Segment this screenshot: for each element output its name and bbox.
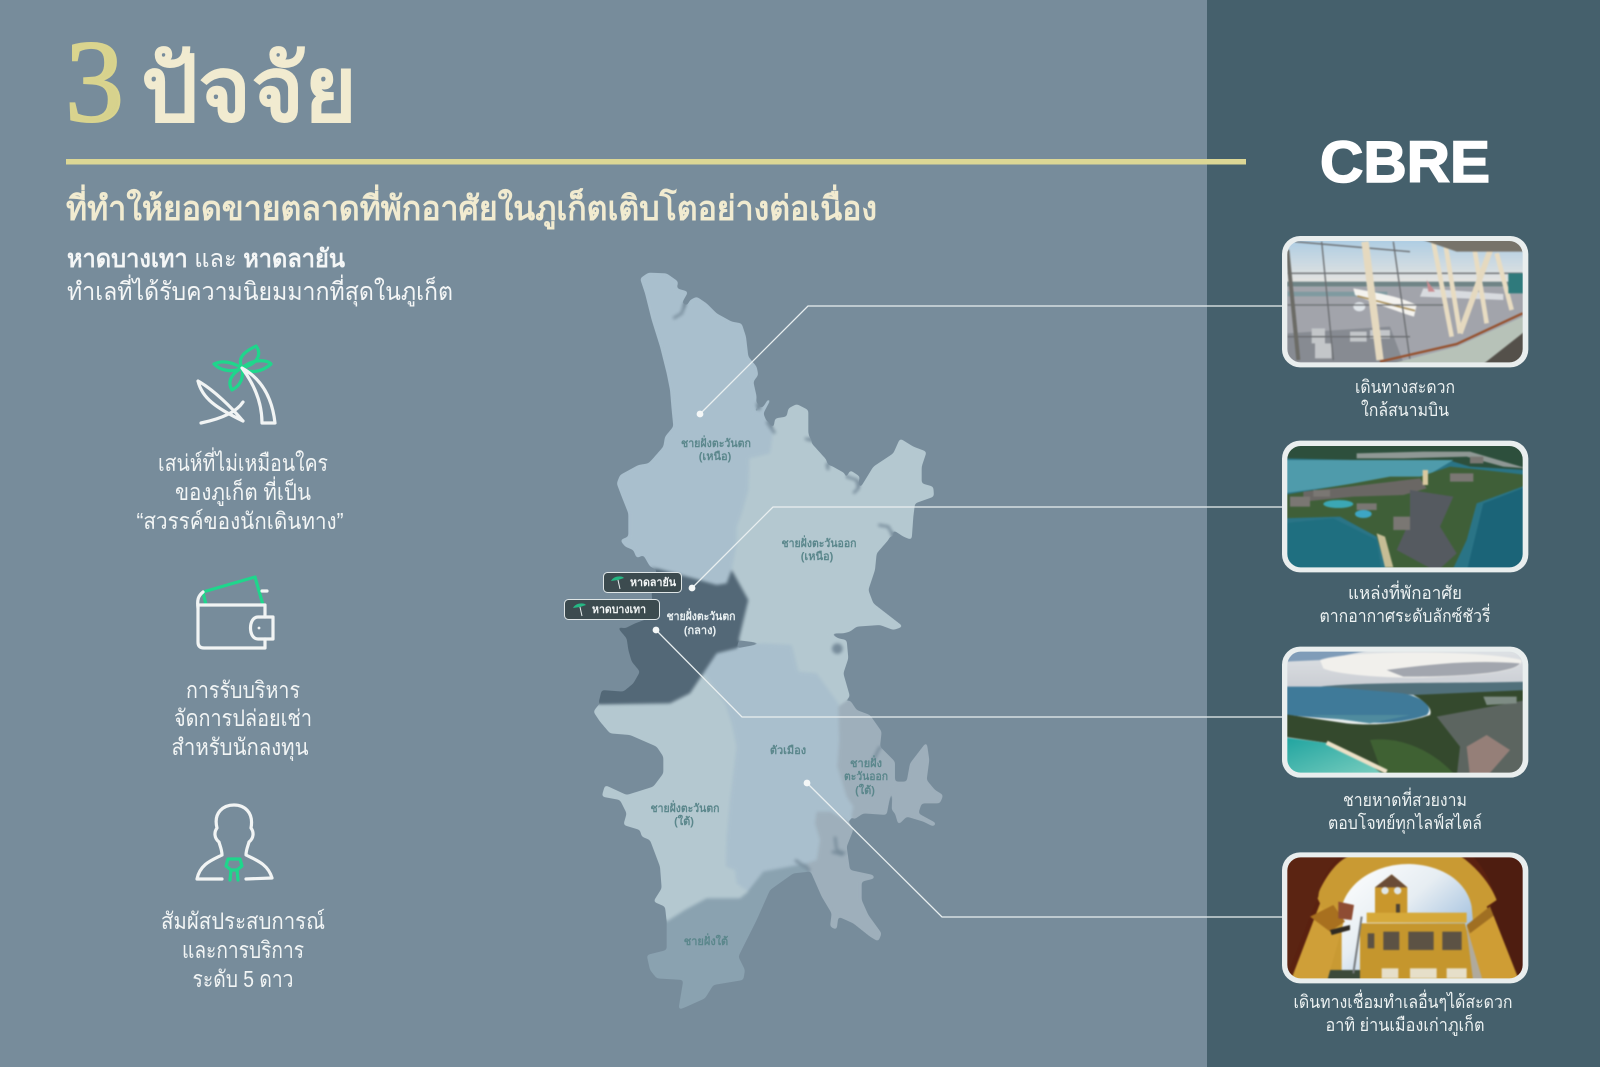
panel: right sidebar <box>1207 0 1600 1067</box>
caption: airport: ใกล้สนามบิน <box>1361 399 1449 420</box>
caption: airport <box>1355 377 1455 420</box>
title: ปัจจัย <box>141 39 357 141</box>
map labels: (ใต้) <box>855 783 875 797</box>
pill: Laiyan beach <box>604 572 682 592</box>
region: west coast north <box>617 273 777 585</box>
caption: luxury stay: ตากอากาศระดับลักซ์ชัวรี่ <box>1320 603 1491 626</box>
region: east coast north <box>732 404 934 707</box>
caption: beaches: ตอบโจทย์ทุกไลฟ์สไตล์ <box>1328 812 1482 834</box>
title: 3 <box>65 16 124 147</box>
region: southeast coast <box>837 700 895 820</box>
map labels: ชายฝั่งตะวันออก <box>782 535 857 550</box>
caption: airport: เดินทางสะดวก <box>1355 377 1455 397</box>
leader line: luxury stay <box>689 507 1282 591</box>
caption: old town: เดินทางเชื่อมทำเลอื่นๆได้สะดวก <box>1294 989 1512 1012</box>
map labels: ชายฝั่งตะวันตก <box>681 435 751 450</box>
text: rental management: จัดการปล่อยเช่า <box>174 705 312 731</box>
title rule <box>66 159 1246 164</box>
text: five star service: สัมผัสประสบการณ์ <box>161 908 325 934</box>
map labels: ชายฝั่งตะวันตก <box>650 800 720 815</box>
region: southeast peninsula <box>807 812 882 942</box>
logo: CBRE: CBRE <box>1320 130 1490 195</box>
text: charm of Phuket: ของภูเก็ต ที่เป็น <box>175 476 311 506</box>
map labels: ตะวันออก <box>844 770 888 783</box>
map of Phuket <box>593 273 943 1010</box>
text: rental management <box>172 677 312 761</box>
pill: Bang Tao beach: หาดบางเทา <box>592 604 646 616</box>
icon: concierge <box>197 805 272 880</box>
photo: old town clock tower <box>1282 852 1528 983</box>
leader line: airport <box>697 306 1282 417</box>
text: five star service: ระดับ 5 ดาว <box>192 966 294 992</box>
photo: airport <box>1282 236 1528 367</box>
region: west coast central <box>598 567 748 704</box>
map labels: ชายฝั่งตะวันตก <box>666 608 736 623</box>
map labels: (เหนือ) <box>801 550 834 563</box>
caption: luxury stay: แหล่งที่พักอาศัย <box>1348 580 1462 603</box>
text: charm of Phuket <box>136 447 344 534</box>
caption: beaches <box>1328 787 1482 834</box>
photo: luxury resort lagoon <box>1282 441 1528 572</box>
intro text: ทำเลที่ได้รับความนิยมมากที่สุดในภูเก็ต <box>67 274 453 307</box>
caption: old town <box>1294 989 1512 1036</box>
map labels: ชายฝั่งใต้ <box>684 933 728 948</box>
caption: luxury stay <box>1320 580 1491 626</box>
region: southeast island <box>892 742 943 827</box>
map labels: (เหนือ) <box>699 450 732 463</box>
icon: wallet <box>198 577 273 648</box>
panel: left background <box>0 0 1207 1067</box>
map labels: ชายฝั่ง <box>850 755 882 770</box>
photo: beach bay <box>1282 647 1528 778</box>
region: west coast south <box>593 673 748 922</box>
caption: old town: อาทิ ย่านเมืองเก่าภูเก็ต <box>1326 1013 1484 1036</box>
leader line: beaches <box>653 627 1282 717</box>
text: five star service <box>161 908 325 992</box>
intro text: หาดบางเทา และ หาดลายัน <box>67 245 345 273</box>
text: charm of Phuket: เสน่ห์ที่ไม่เหมือนใคร <box>158 447 328 476</box>
map labels: ตัวเมือง <box>770 744 806 757</box>
map labels <box>650 435 888 948</box>
region: city <box>703 643 853 892</box>
text: five star service: และการบริการ <box>182 937 304 963</box>
leader line: old town <box>804 780 1282 917</box>
subtitle: ที่ทำให้ยอดขายตลาดที่พักอาศัยในภูเก็ตเติบโตอย่างต่อเนื่อง <box>66 184 877 230</box>
title <box>65 16 357 147</box>
text: charm of Phuket: “สวรรค์ของนักเดินทาง” <box>136 508 344 534</box>
icon: palm and deck chair <box>198 346 275 423</box>
map labels: (กลาง) <box>684 625 716 637</box>
pill: Laiyan beach: หาดลายัน <box>630 576 676 589</box>
text: rental management: การรับบริหาร <box>186 677 300 703</box>
map labels: (ใต้) <box>674 814 694 828</box>
intro text <box>67 245 453 307</box>
caption: beaches: ชายหาดที่สวยงาม <box>1343 787 1467 810</box>
text: rental management: สำหรับนักลงทุน <box>172 734 309 761</box>
pill: Bang Tao beach <box>564 600 660 620</box>
region: south coast <box>647 863 810 1010</box>
